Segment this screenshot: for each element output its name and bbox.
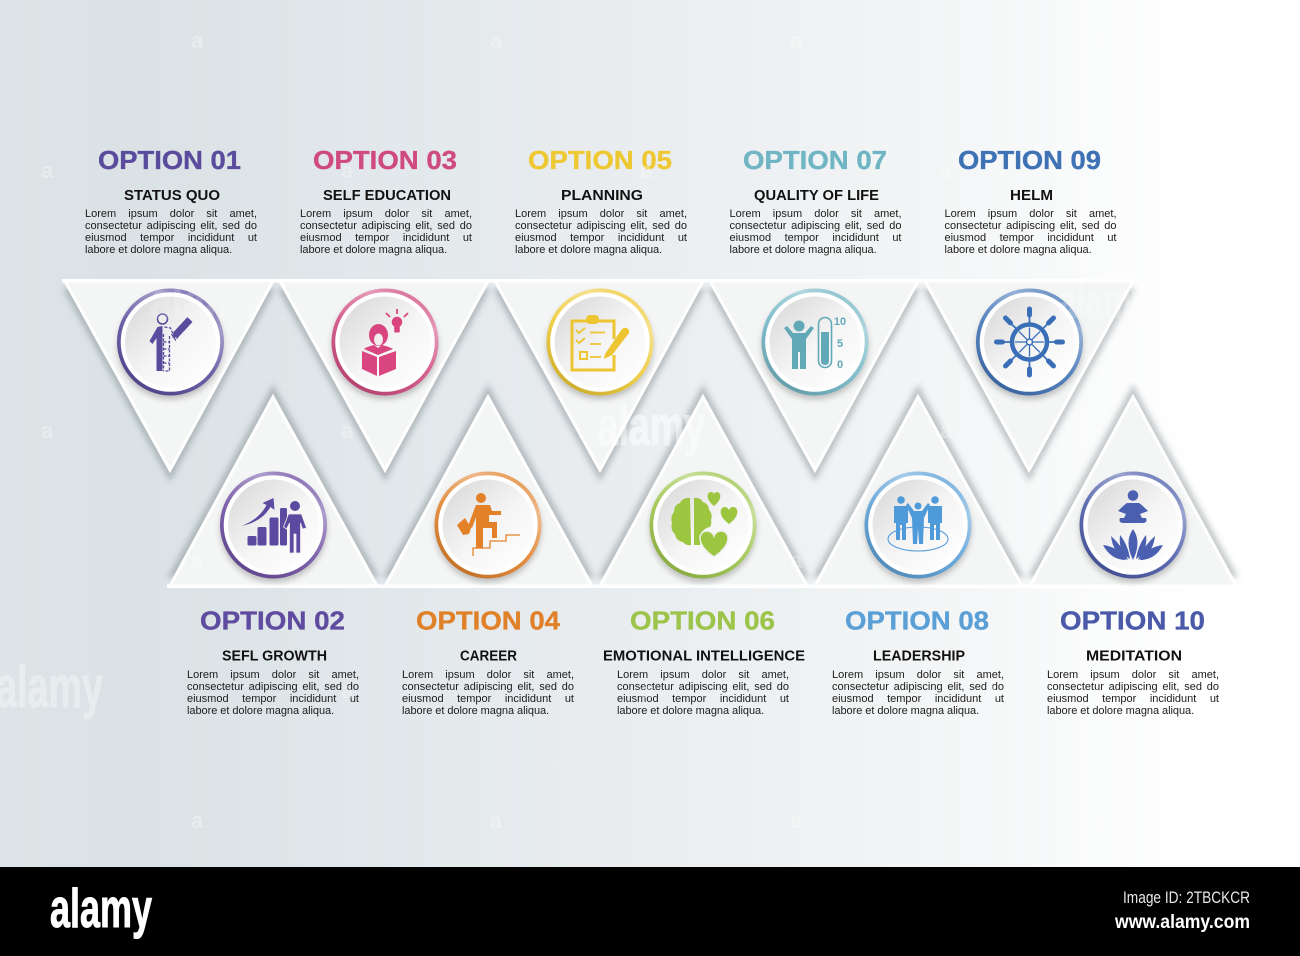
- option 01 subtitle: STATUS QUO: [124, 188, 220, 204]
- icon: person climbing stairs: [457, 493, 520, 556]
- text block: option 09: Lorem ipsum dolor sit amet,: [944, 208, 1116, 220]
- text block: option 06: [617, 668, 789, 717]
- icon: clipboard and pencil: [572, 316, 629, 370]
- text block: option 04: [402, 668, 574, 717]
- icon: three business people in a circle: [888, 496, 948, 551]
- text block: option 10: [1047, 668, 1219, 717]
- icon: growth bars and person: [242, 498, 306, 553]
- text block: option 03: Lorem ipsum dolor sit amet,: [300, 208, 472, 220]
- badge: option 10 meditation: [1080, 472, 1186, 578]
- text block: option 10: eiusmod tempor incididunt ut: [1047, 693, 1219, 705]
- text block: option 02: eiusmod tempor incididunt ut: [187, 693, 359, 705]
- text block: option 10: labore et dolore magna aliqua.: [1047, 705, 1194, 717]
- text block: option 09: labore et dolore magna aliqua.: [944, 244, 1092, 256]
- footer url: www.alamy.com: [1114, 912, 1250, 933]
- upward triangles row: [170, 397, 1236, 586]
- watermarks: a: [41, 158, 54, 183]
- option 01 heading: OPTION 01: [98, 147, 241, 175]
- text block: option 06: eiusmod tempor incididunt ut: [617, 693, 789, 705]
- text block: option 10: Lorem ipsum dolor sit amet,: [1047, 668, 1219, 680]
- watermarks: a: [490, 548, 503, 573]
- option 10 heading: OPTION 10: [1060, 608, 1205, 636]
- option 05 heading: OPTION 05: [528, 147, 672, 175]
- option 06 subtitle: EMOTIONAL INTELLIGENCE: [603, 648, 805, 664]
- option 04 subtitle: CAREER: [460, 648, 517, 664]
- icon: person with pencil: [150, 314, 192, 371]
- footer bar: [0, 867, 1300, 956]
- option 04 heading: OPTION 04: [416, 608, 561, 636]
- text block: option 06: labore et dolore magna aliqua.: [617, 705, 764, 717]
- watermarks: a: [940, 418, 953, 443]
- option 02 heading: OPTION 02: [200, 608, 345, 636]
- badge: option 02 self growth: [220, 472, 327, 578]
- text block: option 08: [832, 668, 1004, 717]
- option 02 subtitle: SEFL GROWTH: [222, 648, 327, 664]
- text block: option 07: labore et dolore magna aliqua.: [730, 244, 877, 256]
- badge: option 03 self education: [332, 288, 438, 396]
- scale numbers: 0: [837, 359, 843, 371]
- icon: meditating figure on lotus: [1103, 490, 1163, 560]
- icon: person reading with lightbulb: [362, 309, 408, 376]
- option 05 subtitle: PLANNING: [561, 188, 643, 204]
- text block: option 03: [300, 208, 472, 256]
- text block: option 01: consectetur adipiscing elit, sed do: [85, 220, 257, 232]
- badge: option 04 career: [434, 472, 542, 578]
- watermarks: a: [341, 678, 354, 703]
- watermarks: a: [940, 158, 953, 183]
- text block: option 04: consectetur adipiscing elit, sed do: [402, 681, 574, 693]
- watermarks: a: [1090, 808, 1103, 833]
- option 08 subtitle: LEADERSHIP: [873, 648, 965, 664]
- option 08 heading: OPTION 08: [845, 608, 989, 636]
- text block: option 09: consectetur adipiscing elit, sed do: [944, 220, 1116, 232]
- text block: option 06: Lorem ipsum dolor sit amet,: [617, 668, 789, 680]
- text block: option 02: consectetur adipiscing elit, sed do: [187, 681, 359, 693]
- text block: option 01: eiusmod tempor incididunt ut: [85, 232, 257, 244]
- text block: option 02: Lorem ipsum dolor sit amet,: [187, 668, 359, 680]
- watermarks: a: [985, 678, 998, 703]
- text block: option 08: Lorem ipsum dolor sit amet,: [832, 668, 1004, 680]
- text block: option 05: labore et dolore magna aliqua.: [515, 244, 662, 256]
- text block: option 04: Lorem ipsum dolor sit amet,: [402, 668, 574, 680]
- option 06 heading: OPTION 06: [630, 608, 775, 636]
- text block: option 01: [85, 208, 257, 256]
- watermarks: alamy: [597, 394, 705, 457]
- icon: ship wheel: [996, 309, 1062, 375]
- text block: option 01: labore et dolore magna aliqua.: [85, 244, 232, 256]
- watermarks: a: [191, 808, 204, 833]
- icon: person and thermometer scale: [784, 316, 846, 371]
- footer image id: Image ID: 2TBCKCR: [1123, 888, 1250, 907]
- text block: option 03: consectetur adipiscing elit, sed do: [300, 220, 472, 232]
- text block: option 09: [944, 208, 1116, 256]
- text block: option 08: labore et dolore magna aliqua.: [832, 705, 979, 717]
- option 07 subtitle: QUALITY OF LIFE: [754, 188, 879, 204]
- text block: option 05: consectetur adipiscing elit, sed do: [515, 220, 687, 232]
- text block: option 02: [187, 668, 359, 717]
- text block: option 05: [515, 208, 687, 256]
- watermarks: alamy: [1058, 273, 1150, 329]
- watermarks: a: [640, 678, 653, 703]
- text block: option 07: eiusmod tempor incididunt ut: [730, 232, 902, 244]
- footer logo: alamy: [50, 877, 152, 939]
- scale numbers: 5: [837, 338, 843, 350]
- badge: option 05 planning: [546, 288, 654, 396]
- watermarks: a: [790, 808, 803, 833]
- watermarks: a: [341, 158, 354, 183]
- watermarks: a: [191, 548, 204, 573]
- option 10 subtitle: MEDITATION: [1086, 648, 1182, 664]
- watermarks: a: [490, 808, 503, 833]
- text block: option 08: consectetur adipiscing elit, sed do: [832, 681, 1004, 693]
- scale numbers: 10: [834, 316, 846, 328]
- text block: option 10: consectetur adipiscing elit, sed do: [1047, 681, 1219, 693]
- text block: option 09: eiusmod tempor incididunt ut: [944, 232, 1116, 244]
- watermarks: a: [191, 28, 204, 53]
- watermarks: a: [341, 418, 354, 443]
- text block: option 01: Lorem ipsum dolor sit amet,: [85, 208, 257, 220]
- option 03 subtitle: SELF EDUCATION: [323, 188, 451, 204]
- text block: option 07: Lorem ipsum dolor sit amet,: [730, 208, 902, 220]
- downward triangles row: [65, 281, 1133, 470]
- text block: option 04: eiusmod tempor incididunt ut: [402, 693, 574, 705]
- text block: option 07: consectetur adipiscing elit, sed do: [730, 220, 902, 232]
- option 03 heading: OPTION 03: [313, 147, 457, 175]
- option 07 heading: OPTION 07: [743, 147, 887, 175]
- watermarks: a: [1090, 28, 1103, 53]
- watermarks: a: [490, 28, 503, 53]
- text block: option 03: labore et dolore magna aliqua.: [300, 244, 447, 256]
- badge: option 08 leadership: [864, 472, 972, 578]
- text block: option 02: labore et dolore magna aliqua.: [187, 705, 334, 717]
- watermarks: a: [790, 548, 803, 573]
- badge: option 06 emotional intelligence: [650, 472, 756, 578]
- option 09 subtitle: HELM: [1010, 188, 1053, 204]
- text block: option 03: eiusmod tempor incididunt ut: [300, 232, 472, 244]
- badge: option 09 helm: [976, 288, 1083, 396]
- text block: option 08: eiusmod tempor incididunt ut: [832, 693, 1004, 705]
- watermarks: a: [790, 28, 803, 53]
- watermarks: alamy: [150, 273, 262, 329]
- watermarks: alamy: [0, 655, 103, 720]
- text block: option 04: labore et dolore magna aliqua.: [402, 705, 549, 717]
- watermarks: a: [41, 418, 54, 443]
- text block: option 07: [730, 208, 902, 256]
- text block: option 06: consectetur adipiscing elit, sed do: [617, 681, 789, 693]
- option 09 heading: OPTION 09: [958, 147, 1101, 175]
- scale numbers: [834, 316, 846, 371]
- badge: option 01 status quo: [117, 288, 224, 396]
- badge: option 07 quality of life: [762, 288, 868, 396]
- watermarks: a: [640, 158, 653, 183]
- text block: option 05: Lorem ipsum dolor sit amet,: [515, 208, 687, 220]
- icon: brain and hearts: [671, 492, 737, 557]
- text block: option 05: eiusmod tempor incididunt ut: [515, 232, 687, 244]
